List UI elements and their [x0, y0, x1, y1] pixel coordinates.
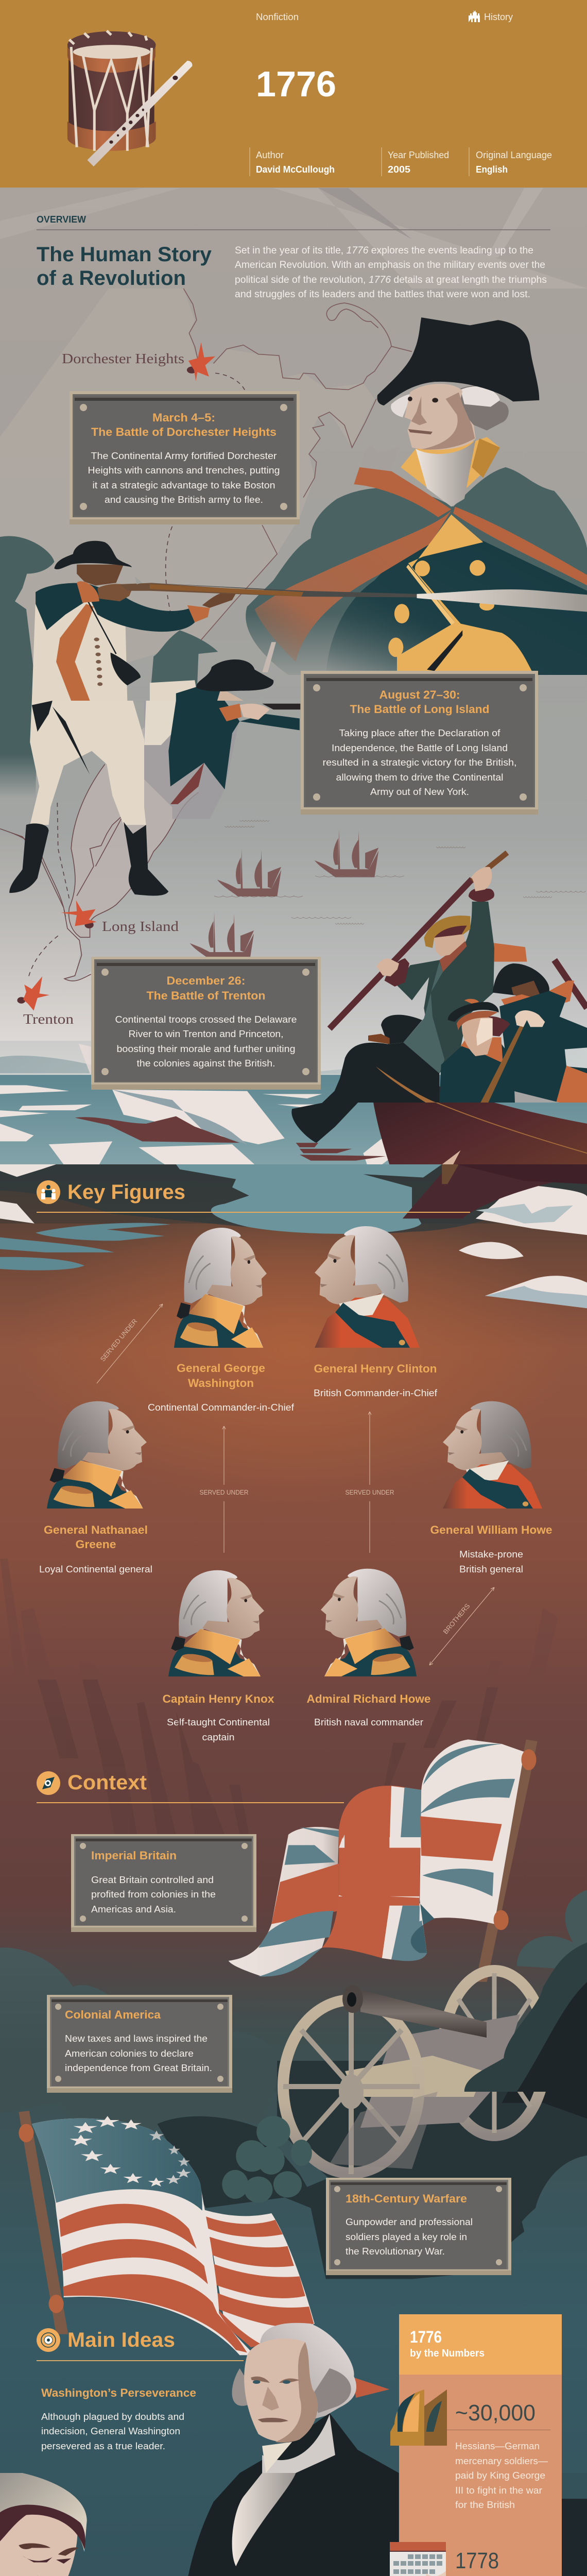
plaque: Battle of Long Island — [301, 671, 538, 815]
illustration: background soldier silhouettes — [0, 536, 218, 701]
figure: Richard Howe — [307, 1692, 430, 1727]
arrow: Knox served under Washington: SERVED UNDER — [200, 1488, 248, 1496]
illustration: map of Long Island land — [0, 701, 198, 1041]
heading: Context — [37, 1771, 344, 1803]
heading: Context: Context — [67, 1771, 147, 1794]
plaque text: New taxes and laws inspired the — [65, 2033, 208, 2044]
illustration: frozen river — [0, 1032, 587, 1164]
illustration: key figures ground and ice — [0, 1164, 587, 1680]
flag front fold — [32, 2119, 255, 2355]
figure: Henry Knox: Self-taught Continental — [167, 1717, 270, 1727]
book meta: Original Language — [476, 150, 552, 160]
header banner — [0, 0, 587, 188]
illustration: Washington portrait, dark coat — [172, 2323, 399, 2576]
plaque text: allowing them to drive the Continental — [336, 772, 504, 783]
overview heading — [37, 214, 550, 290]
plaque text: Gunpowder and professional — [346, 2217, 473, 2227]
plaque text: Independence, the Battle of Long Island — [332, 743, 508, 753]
figure: Henry Knox: Captain Henry Knox — [163, 1692, 274, 1705]
plaque: 18th-Century Warfare — [326, 2178, 511, 2275]
flag centre fold — [322, 1786, 427, 1961]
plaque: Colonial America — [47, 1995, 232, 2093]
figure: Nathanael Greene: General Nathanael — [44, 1523, 148, 1536]
portrait: Nathanael Greene — [47, 1401, 147, 1509]
plaque text: Taking place after the Declaration of — [339, 728, 501, 738]
rope knots — [19, 2124, 64, 2313]
illustration: rifleman aiming musket — [9, 541, 587, 896]
plaque: Battle of Dorchester Heights — [70, 391, 300, 524]
illustration: cannonballs — [222, 2116, 312, 2203]
map: New England coast — [0, 289, 412, 701]
map label: Trenton: Trenton — [23, 1011, 74, 1027]
icon: Hessian hats — [390, 2389, 447, 2446]
plaque text — [88, 451, 280, 505]
book title: 1776 — [256, 64, 336, 104]
illustration: Washington in cloak — [246, 317, 587, 675]
genre labels: Nonfiction — [256, 12, 299, 22]
plaque title: December 26: — [167, 974, 245, 987]
overview text: American Revolution. With an emphasis on the military events over the — [235, 260, 545, 270]
plaque text: it at a strategic advantage to take Boston — [93, 480, 275, 490]
map label: Dorchester Heights: Dorchester Heights — [62, 351, 184, 366]
arrow: Howe brothers: BROTHERS — [442, 1602, 472, 1636]
plaque title: Colonial America — [65, 2008, 161, 2021]
illustration: cannon — [283, 1971, 546, 2174]
stat: French support: 1778 — [455, 2548, 499, 2573]
figure: Henry Clinton: General Henry Clinton — [314, 1362, 437, 1375]
overview heading: of a Revolution — [37, 267, 186, 290]
plaque text: Army out of New York. — [370, 787, 469, 797]
plaque text: soldiers played a key role in — [346, 2232, 467, 2242]
book meta: Author — [256, 150, 284, 160]
figure: Henry Clinton: British Commander-in-Chief — [314, 1388, 438, 1398]
figure: Richard Howe: Admiral Richard Howe — [307, 1692, 430, 1705]
illustration: dead trees and smoke — [0, 1680, 587, 2092]
portrait: William Howe — [443, 1401, 542, 1509]
figure: Henry Knox: captain — [202, 1732, 235, 1742]
genre labels: History — [484, 12, 513, 22]
stat: Hessians — [447, 2400, 550, 2510]
figure: Henry Knox — [163, 1692, 274, 1742]
flag back fold — [202, 2209, 315, 2350]
icons: British ships — [190, 820, 585, 960]
heading: Main Ideas: Main Ideas — [67, 2329, 175, 2351]
illustration: smoke over cannon — [464, 1942, 587, 2092]
arrow: Greene served under Washington — [97, 1304, 163, 1383]
figure: Nathanael Greene — [39, 1523, 152, 1574]
panel: 1776 by the numbers — [383, 2314, 562, 2576]
portrait: George Washington — [174, 1228, 267, 1348]
plaque text: boosting their morale and further uniting — [116, 1044, 296, 1054]
icon: drum and fife — [67, 31, 192, 166]
plaque title: 18th-Century Warfare — [346, 2192, 467, 2205]
book meta: Year Published — [388, 150, 449, 160]
illustration: British flag — [229, 1739, 538, 1982]
overview text: and struggles of its leaders and the battles that were won and lost. — [235, 289, 530, 300]
panel title: by the Numbers — [410, 2348, 485, 2359]
plaque title — [146, 974, 266, 1002]
stat: Hessians: mercenary soldiers— — [455, 2456, 548, 2466]
plaque text — [346, 2217, 473, 2257]
book meta: David McCullough — [256, 164, 335, 175]
arrow: Howe brothers — [429, 1587, 494, 1665]
book meta — [250, 147, 552, 176]
arrow: Knox served under Washington — [200, 1426, 248, 1553]
overview heading: The Human Story — [37, 243, 212, 266]
book meta: English — [476, 164, 508, 175]
figure: Henry Clinton — [314, 1362, 438, 1398]
plaque text: independence from Great Britain. — [65, 2063, 212, 2073]
overview text: Set in the year of its title, 1776 explores the events leading up to the — [235, 245, 533, 256]
stat: Hessians: paid by King George — [455, 2470, 545, 2481]
figure: George Washington: General George — [177, 1362, 265, 1375]
plaque: Battle of Trenton — [91, 957, 321, 1090]
map label: Trenton — [17, 976, 74, 1027]
heading: Key Figures: Key Figures — [67, 1181, 185, 1204]
figure: William Howe: General William Howe — [430, 1523, 552, 1536]
icon: target — [37, 2328, 60, 2352]
illustration: second rifleman — [142, 642, 300, 819]
illustration: flag on table and seamstress — [0, 2473, 399, 2576]
plaque text — [91, 1875, 216, 1914]
illustration: American flag — [19, 2111, 315, 2355]
plaque text: River to win Trenton and Princeton, — [129, 1029, 283, 1039]
figure: Nathanael Greene: Loyal Continental general — [39, 1564, 152, 1574]
plaque title: August 27–30: — [379, 688, 460, 701]
overview sky shards — [0, 188, 587, 289]
plaque text: The Continental Army fortified Dorchester — [91, 451, 277, 461]
plaque text: profited from colonies in the — [91, 1889, 216, 1900]
figure: Richard Howe: British naval commander — [314, 1717, 423, 1727]
idea: Washington's Perseverance — [41, 2386, 196, 2451]
plaque text: the Revolutionary War. — [346, 2246, 445, 2257]
portrait: Henry Knox — [168, 1570, 264, 1676]
plaque text — [65, 2033, 212, 2073]
plaque: Imperial Britain — [71, 1834, 256, 1932]
plaque title — [91, 411, 277, 438]
plaque text: American colonies to declare — [65, 2048, 194, 2059]
rope knots — [494, 1749, 536, 1930]
figure: George Washington — [148, 1362, 295, 1413]
illustration: boat crew — [291, 853, 587, 1164]
plaque text — [322, 728, 517, 797]
stat: Hessians: for the British — [455, 2500, 515, 2510]
figure: William Howe: British general — [459, 1564, 523, 1574]
arrow: Richard Howe served under Clinton: SERVED UNDER — [345, 1488, 394, 1496]
portrait: Richard Howe — [321, 1569, 417, 1676]
flag right fold — [411, 1739, 524, 1953]
plaque text: and causing the British army to flee. — [105, 495, 263, 505]
idea: Washington's Perseverance: indecision, General Washington — [41, 2426, 180, 2436]
figure: William Howe — [430, 1523, 552, 1574]
flag stars — [70, 2116, 191, 2187]
idea: Washington's Perseverance: persevered as a true leader. — [41, 2441, 165, 2451]
idea: Washington's Perseverance: Although plagued by doubts and — [41, 2412, 184, 2422]
plaque text: resulted in a strategic victory for the British, — [322, 757, 517, 768]
panel title — [410, 2328, 485, 2359]
background: overview sky — [0, 188, 587, 1115]
figure: Nathanael Greene: Greene — [75, 1538, 116, 1551]
plaque text: Continental troops crossed the Delaware — [115, 1014, 297, 1025]
heading: Key Figures — [37, 1180, 470, 1213]
flag left fold — [229, 1827, 339, 1977]
map label: Long Island — [61, 901, 179, 934]
genre labels — [256, 10, 513, 22]
icon: people — [37, 1180, 60, 1204]
overview heading: OVERVIEW — [37, 214, 86, 225]
plaque text: Americas and Asia. — [91, 1904, 176, 1914]
map label: Dorchester Heights — [62, 343, 215, 381]
plaque title: March 4–5: — [152, 411, 215, 424]
arrow: Richard Howe served under Clinton — [345, 1412, 394, 1553]
plaque title: Imperial Britain — [91, 1849, 177, 1862]
plaque text: the colonies against the British. — [137, 1058, 275, 1069]
plaque title: The Battle of Trenton — [146, 989, 266, 1002]
idea: Washington's Perseverance: Washington’s Perseverance — [41, 2386, 196, 2399]
plaque title: The Battle of Dorchester Heights — [91, 426, 277, 438]
stat: Hessians: Hessians—German — [455, 2441, 540, 2451]
overview text: political side of the revolution, 1776 details at great length the triumphs — [235, 275, 547, 285]
plaque text: Great Britain controlled and — [91, 1875, 214, 1885]
arrow: Greene served under Washington: SERVED UNDER — [99, 1317, 139, 1363]
icon: calendar — [390, 2542, 446, 2576]
panel title: 1776 — [410, 2328, 442, 2346]
stat: Hessians: ~30,000 — [455, 2400, 536, 2426]
plaque title — [350, 688, 489, 716]
figure: William Howe: Mistake-prone — [459, 1549, 523, 1560]
background: night behind right column — [515, 2473, 587, 2576]
stat: Hessians: III to fight in the war — [455, 2485, 542, 2496]
figure: George Washington: Continental Commander-in-Chief — [148, 1402, 295, 1413]
background: middle sections — [0, 1030, 587, 2576]
plaque text: Heights with cannons and trenches, putting — [88, 465, 280, 476]
plaque title: The Battle of Long Island — [350, 703, 489, 716]
map label: Long Island: Long Island — [102, 919, 179, 934]
seamstress — [0, 2473, 152, 2576]
figure: George Washington: Washington — [188, 1377, 254, 1389]
overview text — [235, 245, 547, 300]
heading: Main Ideas — [37, 2328, 244, 2361]
portrait: Henry Clinton — [315, 1226, 420, 1348]
icon: compass — [37, 1771, 60, 1795]
plaque text — [115, 1014, 297, 1069]
book meta: 2005 — [388, 164, 410, 175]
